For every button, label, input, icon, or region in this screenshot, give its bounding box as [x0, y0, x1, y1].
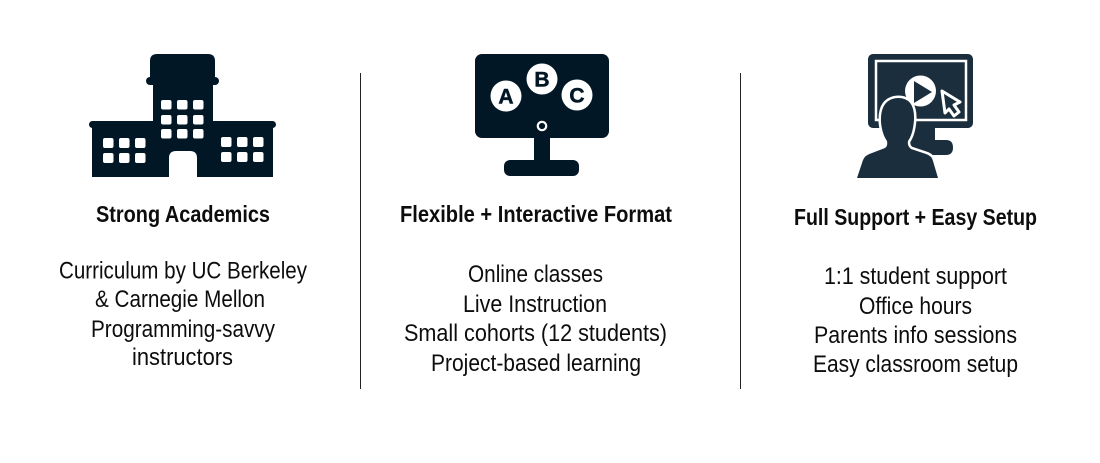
- text block: format details: Small cohorts (12 students): [404, 320, 667, 347]
- heading: flexible format: Flexible + Interactive Format: [400, 201, 672, 227]
- icon: person at monitor: [857, 54, 973, 178]
- icon: monitor with ABC choices: B: [534, 68, 550, 92]
- text block: format details: Live Instruction: [463, 291, 607, 318]
- icon: monitor with ABC choices: A: [498, 86, 514, 108]
- text block: format details: Project-based learning: [431, 350, 641, 377]
- panel: strong academics: [59, 54, 307, 371]
- text block: support details: Office hours: [859, 293, 972, 320]
- text block: support details: [813, 263, 1018, 378]
- panel: full support: [794, 54, 1037, 378]
- text block: academics details: Curriculum by UC Berkeley: [59, 258, 307, 284]
- text block: format details: Online classes: [468, 261, 603, 288]
- icon: monitor with ABC choices: [475, 54, 609, 176]
- heading: full support: Full Support + Easy Setup: [794, 204, 1037, 230]
- heading: strong academics: Strong Academics: [96, 201, 270, 227]
- text block: academics details: [59, 258, 307, 371]
- panel: flexible format: [400, 54, 672, 377]
- text block: support details: 1:1 student support: [824, 263, 1007, 290]
- text block: format details: [404, 261, 667, 377]
- text block: academics details: Programming-savvy: [91, 316, 275, 343]
- text block: academics details: instructors: [132, 344, 233, 371]
- text block: support details: Parents info sessions: [814, 322, 1017, 349]
- text block: support details: Easy classroom setup: [813, 351, 1018, 378]
- text block: academics details: & Carnegie Mellon: [95, 286, 265, 313]
- icon: monitor with ABC choices: C: [569, 84, 585, 108]
- icon: school building: [89, 54, 276, 177]
